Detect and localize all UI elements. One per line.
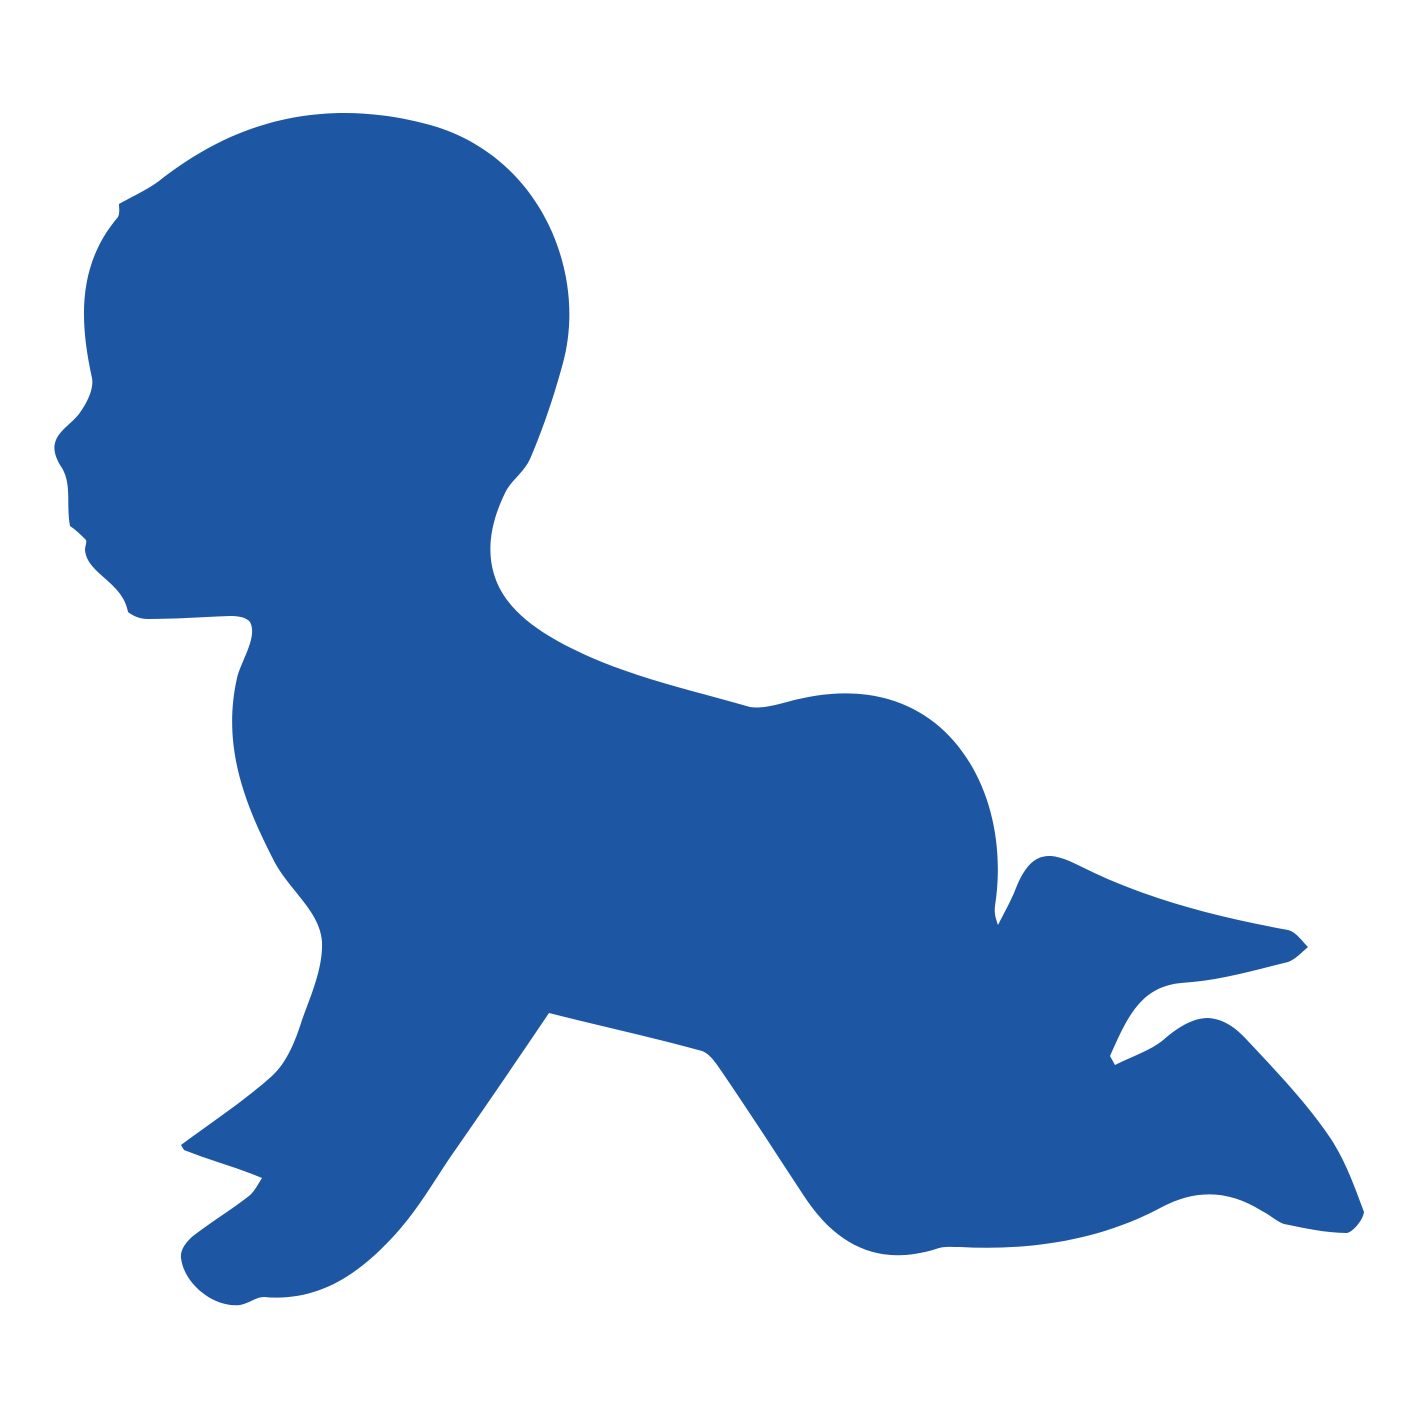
icon: crawling baby silhouette: [54, 113, 1364, 1305]
